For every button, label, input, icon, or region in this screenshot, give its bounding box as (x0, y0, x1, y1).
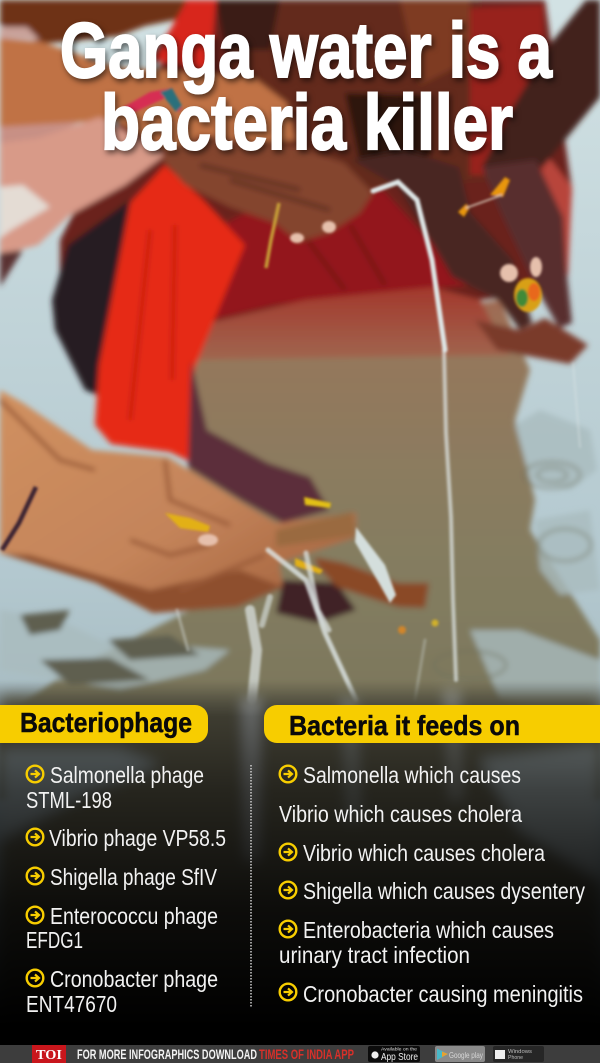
photo: submerged ripples beneath panel (0, 690, 600, 1045)
photo: pale forearm (0, 117, 165, 255)
title: bacteria killer (101, 78, 513, 166)
list item: Shigella phage: Shigella phage SfIV (50, 864, 217, 890)
list item: Cronobacter phage (26, 966, 218, 1017)
footer: Windows Phone badge: Windows (508, 1049, 533, 1055)
list item: Enterobacteria: urinary tract infection (279, 942, 470, 968)
photo: water streams (177, 182, 580, 700)
panel: bacteria it feeds on column (264, 705, 600, 1007)
photo: thigh (191, 287, 510, 360)
footer: Google play badge (435, 1046, 485, 1062)
footer: download message: TIMES OF INDIA APP (259, 1046, 354, 1062)
list item: Cronobacter phage: Cronobacter phage (50, 966, 218, 992)
heading: Bacteriophage: Bacteriophage (20, 707, 192, 738)
list item: Enterococcu phage (26, 903, 218, 953)
photo: upper left arm (0, 38, 295, 150)
footer: download message: FOR MORE INFOGRAPHICS DOWNLOAD (77, 1046, 257, 1062)
photo: body silhouette behind arms (60, 0, 572, 400)
footer: Windows Phone badge: Phone (508, 1055, 523, 1061)
footer: TOI logo: TOI (36, 1048, 62, 1063)
photo: dark foot (188, 360, 329, 523)
footer: App Store badge: Available on the (381, 1046, 418, 1052)
list item: Salmonella phage: Salmonella phage (50, 762, 204, 788)
photo: bright red scarf (150, 0, 216, 69)
list item: Enterobacteria (279, 917, 554, 968)
photo: dark red garment (191, 190, 470, 325)
photo: pouring hand (160, 135, 373, 242)
footer: App Store badge (368, 1046, 420, 1063)
footer: App Store badge: App Store (381, 1052, 418, 1063)
footer: TOI logo (32, 1045, 66, 1063)
photo: second foot and shadow (276, 580, 356, 623)
photo: central torso (216, 0, 490, 190)
footer: Windows Phone badge (493, 1046, 544, 1062)
list item: Enterococcu phage: Enterococcu phage (50, 903, 218, 929)
photo: ripples and light water patches (0, 410, 600, 720)
list item: Salmonella phage: STML-198 (26, 787, 112, 813)
photo: leaf bowl (475, 318, 588, 364)
list item: Salmonella (279, 762, 523, 827)
photo: face top left (0, 0, 190, 44)
photo: brown river reflection (0, 300, 600, 800)
list item: Salmonella phage (26, 762, 204, 813)
photo: bracelets (122, 88, 182, 112)
heading: Bacteria it feeds on (264, 705, 600, 743)
list item: Salmonella: Salmonella which causes (303, 762, 521, 788)
panel: bacteriophage column (0, 705, 226, 1017)
list item: Salmonella: Vibrio which causes cholera (279, 801, 523, 827)
photo: cupped hands lower left (0, 390, 356, 613)
heading: Bacteria it feeds on: Bacteria it feeds on (289, 710, 520, 741)
photo: fingertips (198, 221, 542, 546)
list item: Vibrio: Vibrio which causes cholera (303, 840, 546, 866)
photo: marigold petals and flowers (490, 177, 510, 197)
photo: dark body left (52, 200, 150, 400)
list item: Cronobacter phage: ENT47670 (26, 991, 117, 1017)
footer: Google play badge: Google play (449, 1050, 484, 1060)
list item: Vibrio phage: Vibrio phage VP58.5 (49, 825, 226, 851)
title (60, 6, 552, 166)
photo: gold thread (266, 203, 279, 268)
list item: Enterobacteria: Enterobacteria which causes (303, 917, 554, 943)
footer bar (0, 1045, 600, 1063)
photo: right dark arm and hands (482, 0, 600, 167)
dark gradient overlay (0, 680, 600, 1045)
list item: Enterococcu phage: EFDG1 (26, 927, 83, 953)
